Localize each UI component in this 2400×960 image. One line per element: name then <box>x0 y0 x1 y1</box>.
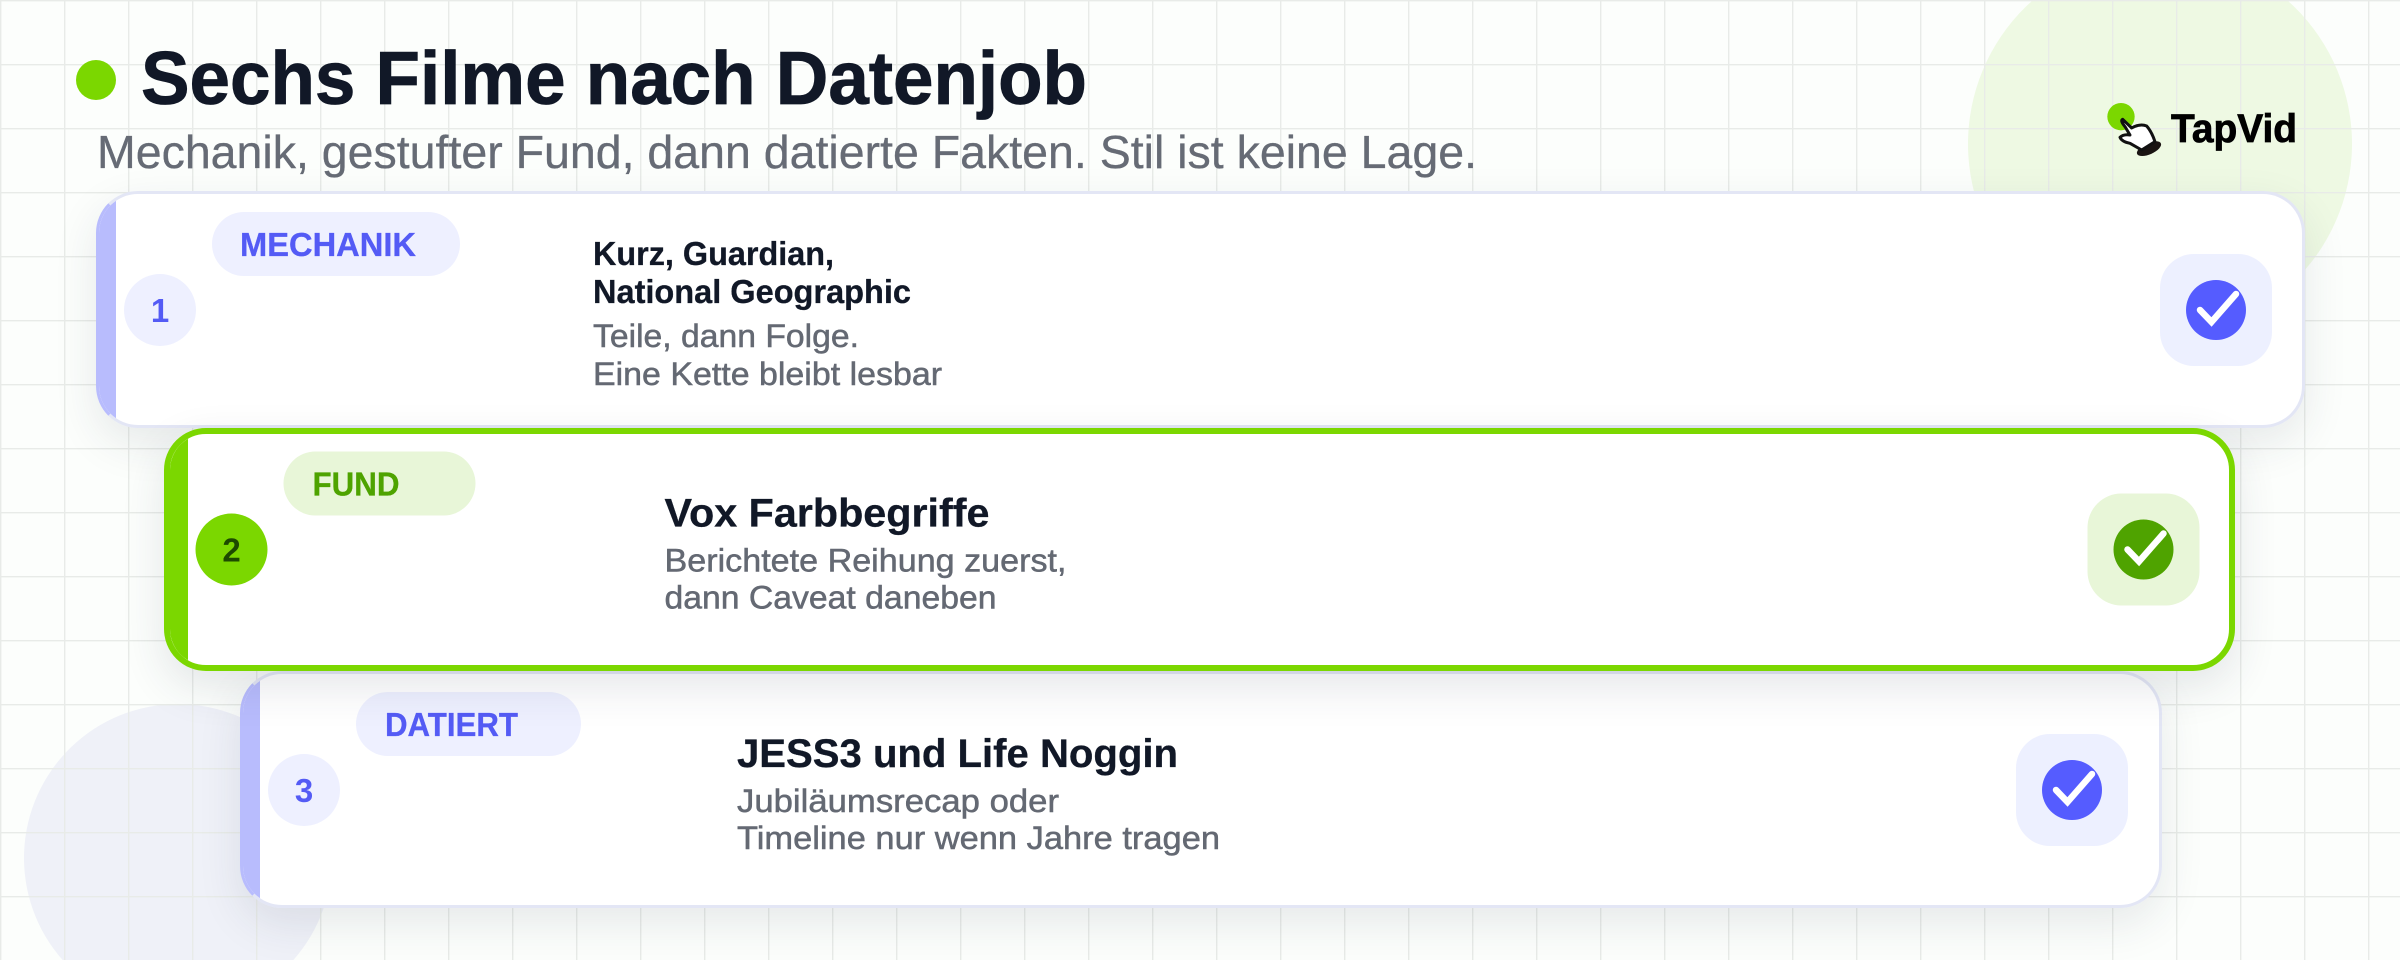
step number 2 <box>196 514 268 586</box>
tag: FUND: FUND <box>312 466 400 502</box>
description: Berichtete Reihung zuerst, <box>664 542 1066 578</box>
subtitle: Mechanik, gestufter Fund, dann datierte Fakten. Stil ist keine Lage. <box>97 126 1477 178</box>
icon: check <box>2160 254 2272 366</box>
header text <box>97 36 1477 178</box>
title: Sechs Filme nach Datenjob <box>141 36 1087 120</box>
heading: Kurz, Guardian, National Geographic <box>593 235 911 310</box>
tag: FUND <box>284 452 476 516</box>
description <box>737 783 1220 856</box>
description: Timeline nur wenn Jahre tragen <box>737 820 1220 856</box>
heading: Kurz, Guardian, National Geographic: Kurz, Guardian, <box>593 235 834 272</box>
logo: TapVid <box>2107 103 2297 156</box>
accent bar <box>170 434 188 665</box>
icon: check <box>2088 494 2200 606</box>
step number 3: 3 <box>295 772 313 809</box>
icon: tapping hand <box>2107 103 2163 159</box>
description <box>664 542 1066 616</box>
panel: card 1 Mechanik <box>96 191 2305 428</box>
tag: DATIERT <box>356 692 581 756</box>
tag: MECHANIK: MECHANIK <box>240 226 416 263</box>
heading: JESS3 und Life Noggin: JESS3 und Life Noggin <box>737 732 1178 776</box>
heading: Kurz, Guardian, National Geographic: National Geographic <box>593 273 911 310</box>
description: Jubiläumsrecap oder <box>737 783 1059 819</box>
icon: check <box>2016 734 2128 846</box>
tag: DATIERT: DATIERT <box>385 706 518 743</box>
title bullet dot <box>76 60 116 100</box>
step number 1: 1 <box>151 292 169 329</box>
panel: card 3 Datiert <box>240 671 2162 908</box>
description <box>593 318 942 392</box>
accent bar <box>243 674 260 905</box>
description: Teile, dann Folge. <box>593 318 859 354</box>
description: Eine Kette bleibt lesbar <box>593 356 942 392</box>
logo wordmark: TapVid <box>2171 107 2297 151</box>
step number 1 <box>124 274 196 346</box>
heading: Vox Farbbegriffe: Vox Farbbegriffe <box>664 492 990 536</box>
panel: card 2 Fund (highlighted) <box>164 428 2235 671</box>
accent bar <box>99 194 116 425</box>
step number 2: 2 <box>222 532 241 568</box>
step number 3 <box>268 754 340 826</box>
tag: MECHANIK <box>212 212 460 276</box>
description: dann Caveat daneben <box>664 580 996 616</box>
